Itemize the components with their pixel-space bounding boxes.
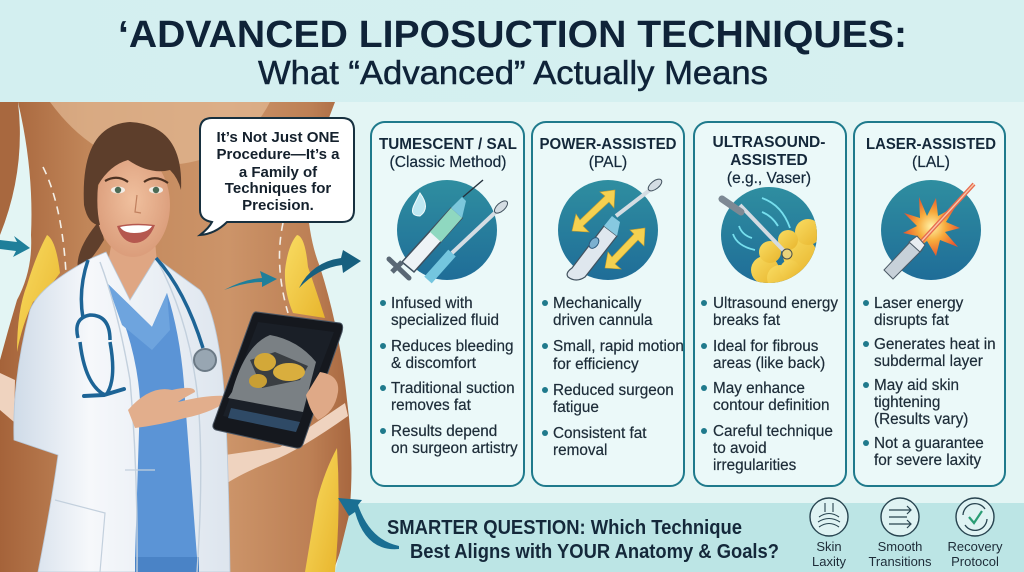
bullet list: subdermal layer	[874, 353, 983, 370]
panel: power-assisted PAL	[532, 122, 684, 486]
fat deposit left	[17, 235, 60, 352]
tablet fingers	[306, 372, 338, 420]
bullet list: Reduced surgeon	[553, 382, 674, 399]
title	[118, 14, 907, 91]
heading: (PAL)	[589, 154, 627, 171]
label: recovery protocol: Protocol	[951, 554, 999, 569]
bullet list: May enhance	[713, 380, 805, 397]
arrow: centre pointing at fat	[224, 271, 277, 290]
scrubs pants	[135, 557, 199, 572]
bullet list: (Results vary)	[874, 411, 968, 428]
bullet list: for severe laxity	[874, 452, 981, 469]
eyes and brows	[105, 178, 168, 183]
tablet	[213, 312, 343, 448]
icon: syringe and cannula	[389, 180, 510, 280]
doctor figure	[14, 122, 233, 572]
bullet list: Infused with	[391, 295, 473, 312]
coat pocket	[55, 470, 155, 572]
heading: (LAL)	[912, 154, 950, 171]
bullet list: breaks fat	[713, 312, 781, 329]
bullet list: removal	[553, 442, 607, 459]
bullet list: fatigue	[553, 399, 599, 416]
face	[96, 153, 170, 257]
bullet list: Careful technique	[713, 423, 833, 440]
fat deposit right	[285, 235, 325, 318]
bullet list: Laser energy	[874, 295, 964, 312]
scrubs top	[107, 283, 197, 557]
fat on ultrasound	[254, 353, 276, 371]
arrow: left pointing at fat	[0, 236, 30, 257]
bullet list: Traditional suction	[391, 380, 515, 397]
heading	[712, 134, 826, 187]
label: recovery protocol	[948, 539, 1003, 569]
bullet list: irregularities	[713, 457, 797, 474]
incision line right	[279, 223, 288, 313]
heading: (Classic Method)	[390, 154, 506, 171]
smarter question callout: Best Aligns with YOUR Anatomy & Goals?	[410, 541, 779, 563]
lab coat	[14, 252, 230, 572]
bullet list	[542, 295, 684, 459]
panel: tumescent SAL	[371, 122, 524, 486]
bullet list: areas (like back)	[713, 355, 825, 372]
incision line left	[43, 167, 66, 273]
label: skin laxity: Laxity	[812, 554, 846, 569]
heading: TUMESCENT / SAL	[379, 136, 517, 153]
label: smooth transitions: Transitions	[868, 554, 932, 569]
bottom question band	[335, 503, 1024, 572]
bullet list: Ideal for fibrous	[713, 338, 819, 355]
icon: laser fibre	[881, 180, 981, 280]
bullet list: specialized fluid	[391, 312, 499, 329]
bullet list: driven cannula	[553, 312, 653, 329]
heading: ASSISTED	[730, 152, 808, 169]
bullet list: contour definition	[713, 397, 830, 414]
icon: recovery protocol	[956, 498, 994, 536]
icon: powered cannula	[558, 177, 664, 280]
bullet list: Small, rapid motion	[553, 338, 684, 355]
bullet list: disrupts fat	[874, 312, 950, 329]
bullet list: on surgeon artistry	[391, 440, 518, 457]
bullet list	[863, 295, 996, 469]
bullet list: Not a guarantee	[874, 435, 984, 452]
bullet list: to avoid	[713, 440, 767, 457]
body illustration background	[0, 102, 352, 572]
speech bubble: a Family of	[239, 164, 318, 181]
heading: LASER-ASSISTED	[866, 136, 996, 153]
bullet list: for efficiency	[553, 356, 639, 373]
speech bubble: It’s Not Just ONE	[216, 129, 340, 146]
arrow: curved to lower fat	[338, 498, 399, 549]
heading	[379, 136, 517, 171]
label: smooth transitions	[868, 539, 932, 569]
bullet list: Results depend	[391, 423, 497, 440]
ultrasound screen	[223, 322, 334, 432]
label: skin laxity	[812, 539, 846, 569]
nose and smile	[135, 195, 141, 213]
bullet list: May aid skin	[874, 377, 959, 394]
stethoscope	[77, 258, 203, 395]
bullet list: & discomfort	[391, 355, 477, 372]
fat deposit lower	[305, 448, 339, 572]
bullet list: removes fat	[391, 397, 472, 414]
label: smooth transitions: Smooth	[878, 539, 922, 554]
label: skin laxity: Skin	[816, 539, 842, 554]
speech bubble: Procedure—It’s a	[216, 146, 340, 163]
icon: smooth transitions	[881, 498, 919, 536]
heading: POWER-ASSISTED	[540, 136, 676, 153]
hand	[128, 388, 233, 428]
bullet list: Generates heat in	[874, 336, 996, 353]
bullet list	[380, 295, 518, 457]
icon: ultrasound probe on fat	[721, 187, 821, 291]
heading	[866, 136, 996, 171]
bullet list: Reduces bleeding	[391, 338, 513, 355]
ponytail	[77, 220, 104, 272]
arrow: curved outward	[299, 250, 361, 288]
hair	[84, 122, 181, 225]
label: recovery protocol: Recovery	[948, 539, 1003, 554]
heading: (e.g., Vaser)	[727, 170, 811, 187]
heading: ULTRASOUND-	[712, 134, 826, 151]
bullet list: Mechanically	[553, 295, 642, 312]
icon: skin laxity	[810, 498, 848, 536]
smarter question callout	[387, 517, 779, 563]
header band	[0, 0, 1024, 102]
bullet list: Consistent fat	[553, 425, 647, 442]
bullet list: Ultrasound energy	[713, 295, 838, 312]
coat lapels and front edge	[100, 258, 201, 572]
underwear	[0, 373, 348, 490]
speech bubble: Techniques for	[225, 180, 331, 197]
neck	[106, 240, 158, 300]
smarter question callout: SMARTER QUESTION: Which Technique	[387, 517, 742, 539]
title: ‘ADVANCED LIPOSUCTION TECHNIQUES:	[118, 14, 907, 56]
heading	[540, 136, 676, 171]
title: What “Advanced” Actually Means	[258, 54, 768, 91]
bullet list: tightening	[874, 394, 940, 411]
bullet list	[701, 295, 838, 474]
speech bubble	[200, 118, 354, 235]
scrubs v-neck	[107, 283, 170, 350]
panel: ultrasound-assisted	[694, 122, 846, 486]
panel: laser-assisted LAL	[854, 122, 1005, 486]
speech bubble: Precision.	[242, 197, 314, 214]
